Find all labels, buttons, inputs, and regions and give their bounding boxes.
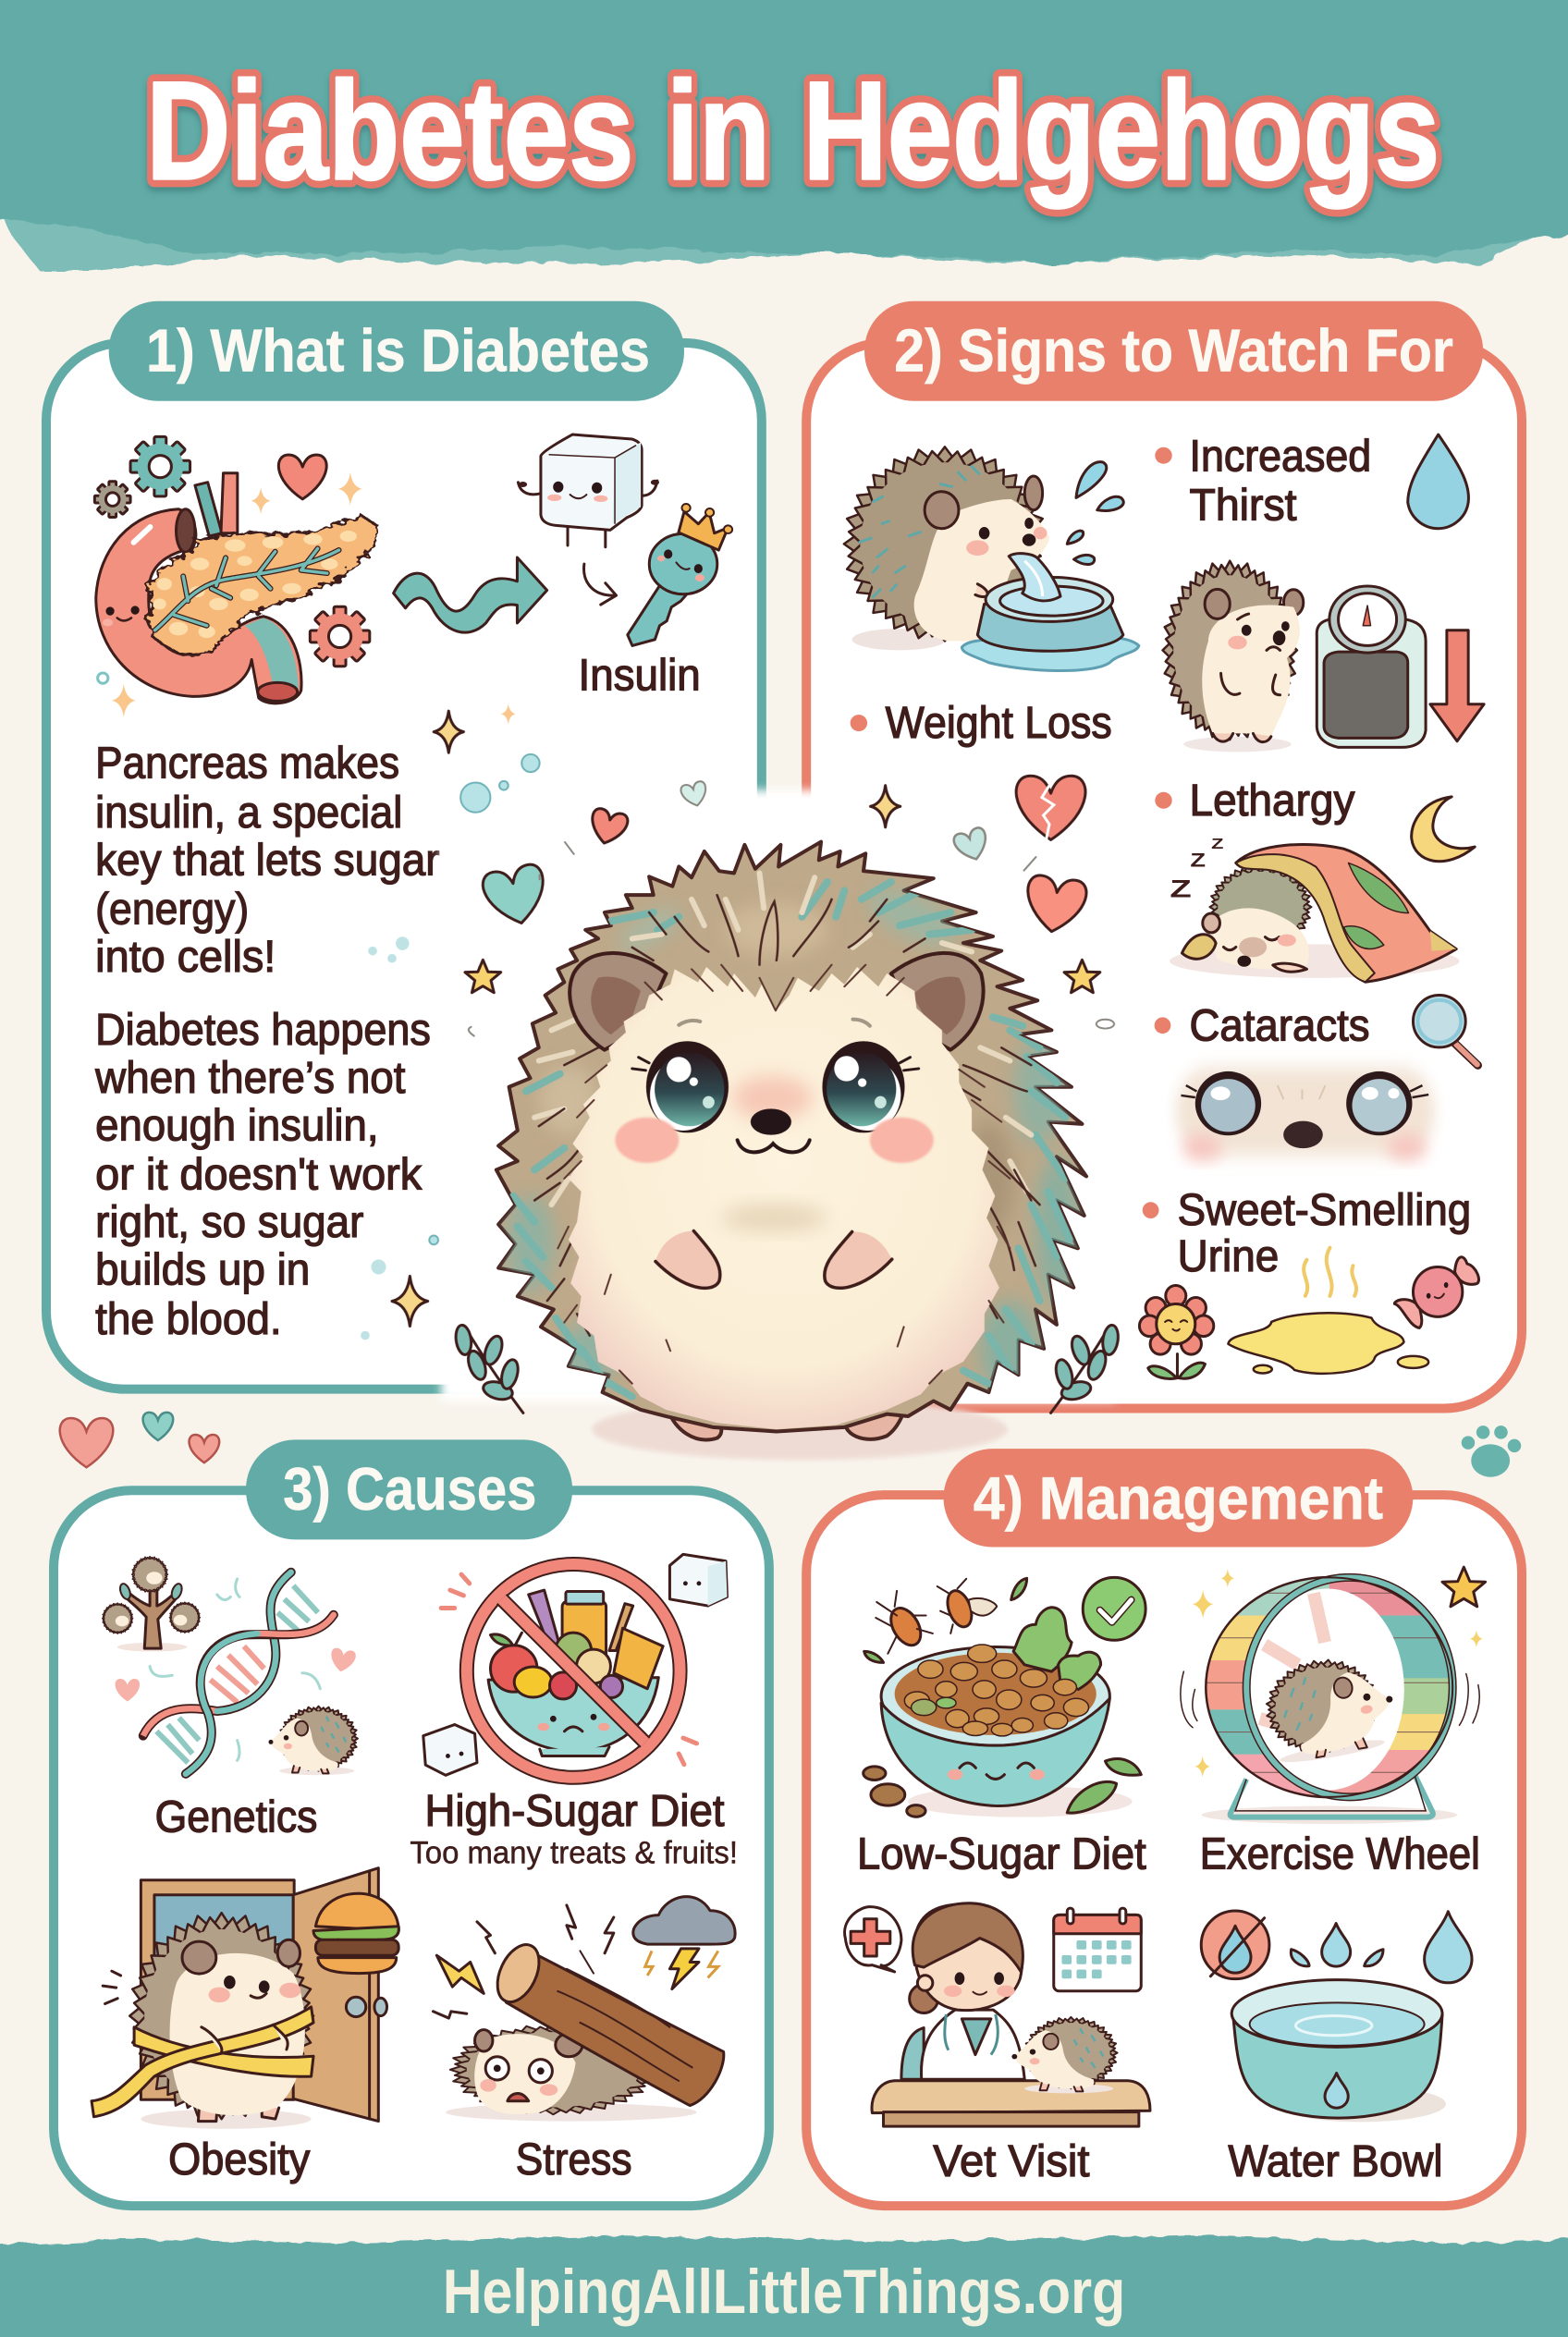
icon: sugar cubes xyxy=(423,1554,727,1775)
feet xyxy=(666,1401,905,1439)
icon: cloudy eyes xyxy=(1176,1068,1435,1159)
label: low-sugar diet: Low-Sugar Diet xyxy=(857,1829,1146,1879)
icon: water drops xyxy=(1291,1912,1472,1983)
arrow xyxy=(394,557,547,632)
text: zzz: Z xyxy=(1211,836,1224,852)
icon: exercise wheel xyxy=(1181,1567,1486,1824)
icon: burger xyxy=(313,1893,398,1974)
icon: high-sugar diet banned xyxy=(467,1564,680,1778)
text: what diabetes is: Diabetes happens xyxy=(95,1005,431,1055)
icon: flower xyxy=(1139,1285,1214,1378)
icon: smell waves xyxy=(1304,1248,1356,1296)
text: what diabetes is xyxy=(94,1005,431,1344)
icon: magnifying glass xyxy=(1413,996,1478,1065)
header banner xyxy=(0,0,1568,271)
label: stress: Stress xyxy=(516,2135,632,2184)
pale spine dabs xyxy=(534,874,1031,1205)
panel: signs to watch for xyxy=(806,301,1522,1409)
bullet: urine xyxy=(1143,1202,1158,1218)
text: what insulin does: key that lets sugar xyxy=(95,835,440,885)
text: what insulin does: (energy) xyxy=(95,885,249,935)
label: sweet-smelling urine: Sweet-Smelling xyxy=(1178,1185,1471,1235)
label: sweet-smelling urine: Urine xyxy=(1178,1231,1279,1281)
label: insulin: Insulin xyxy=(579,650,701,700)
icon: genetics xyxy=(101,1555,361,1775)
brows xyxy=(679,1020,870,1026)
ground shadow xyxy=(592,1399,1008,1460)
text: what insulin does: Pancreas makes xyxy=(95,739,399,789)
icon: sugar cube xyxy=(518,434,659,547)
icon: green check badge xyxy=(1083,1577,1145,1640)
text: zzz: Z xyxy=(1170,875,1192,903)
icon: moon xyxy=(1412,797,1475,862)
illustrations: lethargy cataracts urine xyxy=(1139,797,1479,1378)
arrow: weight down xyxy=(1430,630,1484,741)
icon: sleeping hedgehog under blanket xyxy=(1170,844,1460,982)
icon: stress hedgehog under log xyxy=(433,1897,735,2122)
cream belly and face xyxy=(569,967,999,1429)
decoration: hearts above causes xyxy=(60,1413,219,1467)
bullet: weight loss xyxy=(851,715,867,731)
icon: big water drop xyxy=(1408,434,1468,529)
label: increased thirst: Thirst xyxy=(1190,481,1297,531)
illustrations: thirst and weight loss xyxy=(836,434,1484,809)
label: sweet-smelling urine xyxy=(1178,1185,1471,1281)
heading: causes: 3) Causes xyxy=(283,1456,536,1523)
icon: heart xyxy=(278,455,326,499)
heading: management: 4) Management xyxy=(974,1465,1383,1532)
spine strokes xyxy=(534,895,1040,1336)
cheeks xyxy=(615,1118,934,1163)
coat colour washes xyxy=(507,874,1078,1397)
text: what diabetes is: when there’s not xyxy=(94,1053,406,1103)
note: too many treats: Too many treats & fruits! xyxy=(410,1835,738,1870)
belly shade xyxy=(721,1205,827,1230)
label: obesity: Obesity xyxy=(168,2135,311,2184)
icon: water bowl and puddle xyxy=(962,554,1139,671)
icon: left leaf sprig xyxy=(454,1324,523,1413)
hero hedgehog xyxy=(496,842,1086,1460)
label: increased thirst xyxy=(1190,432,1371,531)
white backing behind hero hedgehog xyxy=(441,790,1115,1401)
icon: gears xyxy=(94,436,370,667)
icon: drinking hedgehog xyxy=(836,439,1053,650)
text: zzz xyxy=(1170,836,1224,903)
text: what insulin does: into cells! xyxy=(95,932,276,982)
panel: management xyxy=(806,1449,1522,2206)
icon: insects xyxy=(876,1579,997,1654)
icon: pancreas xyxy=(96,473,379,704)
teal spine dabs xyxy=(513,882,1070,1397)
footer url: HelpingAllLittleThings.org xyxy=(443,2257,1125,2327)
arrow: curved small xyxy=(584,564,617,605)
icon: urine puddle xyxy=(1228,1313,1428,1374)
heading: signs xyxy=(864,301,1483,401)
footer banner xyxy=(0,2235,1568,2337)
icon: water splashes xyxy=(1067,462,1123,565)
label: high-sugar diet: High-Sugar Diet xyxy=(424,1786,725,1836)
heading: what is diabetes xyxy=(109,301,684,401)
fur fringe lines xyxy=(557,965,1010,1384)
label: exercise wheel: Exercise Wheel xyxy=(1200,1829,1480,1879)
icon: key xyxy=(628,504,732,645)
heading: what is diabetes: 1) What is Diabetes xyxy=(146,317,650,384)
paws xyxy=(655,1230,892,1288)
icon: low-sugar food bowl xyxy=(864,1578,1141,1817)
text: what diabetes is: enough insulin, xyxy=(95,1100,378,1150)
panel: causes xyxy=(54,1439,769,2206)
icon: weighing scale xyxy=(1317,586,1426,747)
decoration: hearts and stars around hero xyxy=(361,704,1114,1340)
text: what diabetes is: or it doesn't work xyxy=(95,1150,423,1200)
bullet: increased thirst xyxy=(1155,447,1172,464)
text: what diabetes is: the blood. xyxy=(95,1294,282,1344)
icon: broken heart xyxy=(1016,776,1085,839)
label: vet visit: Vet Visit xyxy=(933,2136,1090,2186)
icon: obesity hedgehog at door xyxy=(92,1868,387,2129)
icon: no water drop sign xyxy=(1201,1911,1269,1979)
ears xyxy=(570,953,984,1050)
label: increased thirst: Increased xyxy=(1190,432,1371,482)
nose and mouth xyxy=(738,1108,810,1152)
icon: candy xyxy=(1394,1257,1479,1328)
label: water bowl: Water Bowl xyxy=(1228,2136,1443,2186)
right eye xyxy=(822,1041,919,1132)
text: what diabetes is: builds up in xyxy=(95,1245,310,1295)
icon: thin worried hedgehog xyxy=(1158,554,1304,752)
bullet: cataracts xyxy=(1155,1017,1170,1034)
spiny coat xyxy=(496,842,1086,1432)
left eye xyxy=(632,1041,729,1132)
heading: management xyxy=(944,1449,1413,1547)
panel: what is diabetes xyxy=(46,301,762,1389)
label: genetics: Genetics xyxy=(155,1792,317,1841)
heading: causes xyxy=(246,1439,572,1539)
label: lethargy: Lethargy xyxy=(1190,776,1355,826)
label: cataracts: Cataracts xyxy=(1190,1000,1370,1050)
icon: panel sparkles xyxy=(98,472,362,717)
icon: paw print xyxy=(1462,1425,1521,1477)
text: what diabetes is: right, so sugar xyxy=(95,1197,363,1247)
text: zzz: Z xyxy=(1190,850,1206,871)
bullet: lethargy xyxy=(1155,792,1172,809)
icon: big water bowl xyxy=(1231,1980,1446,2122)
heading: signs: 2) Signs to Watch For xyxy=(894,317,1453,384)
muzzle tint xyxy=(732,1076,813,1120)
icon: vet with hedgehog xyxy=(845,1903,1150,2126)
label: weight loss: Weight Loss xyxy=(886,698,1112,748)
text: what insulin does xyxy=(95,739,440,982)
icon: right leaf sprig xyxy=(1051,1324,1120,1413)
icon: insulin key and sugar cube xyxy=(518,434,732,645)
text: what insulin does: insulin, a special xyxy=(95,788,402,838)
